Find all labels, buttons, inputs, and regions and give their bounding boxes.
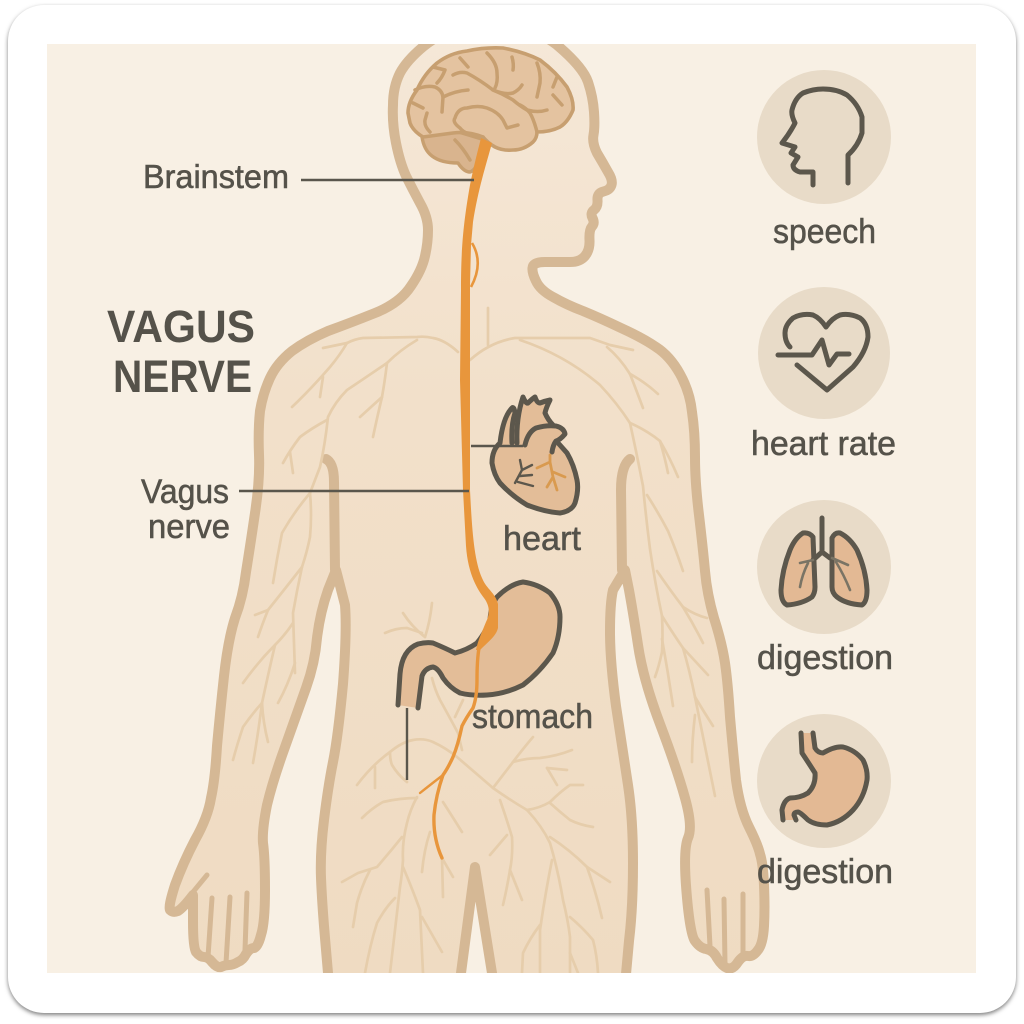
icon circle — [757, 500, 891, 634]
body figure — [170, 20, 765, 985]
coronary vessels, orange — [537, 455, 565, 490]
icon: head profile — [782, 89, 862, 185]
label: Brainstem: Brainstem — [143, 158, 289, 195]
aorta — [517, 397, 553, 443]
icon: lungs — [781, 518, 867, 605]
icon: stomach — [782, 733, 867, 825]
label: digestion — [757, 853, 893, 891]
icon: brain — [408, 48, 573, 172]
stomach organ — [398, 582, 560, 708]
cerebrum — [408, 48, 573, 150]
icon circle — [757, 714, 891, 848]
label: digestion — [757, 639, 893, 677]
main nerve trunk — [460, 138, 498, 650]
body silhouette — [170, 20, 765, 985]
leader: vagus nerve — [239, 490, 469, 492]
leader: stomach — [406, 708, 408, 780]
brain folds — [413, 53, 562, 160]
label: stomach: stomach — [472, 698, 593, 736]
label: Vagus nerve: nerve — [148, 508, 230, 546]
item: lungs digestion — [757, 500, 893, 677]
icon circle — [757, 70, 891, 204]
heart outline — [492, 408, 578, 513]
coronary nerve, dark — [515, 460, 533, 486]
arch — [525, 426, 565, 452]
leader: brainstem — [301, 179, 474, 181]
icon: heart organ — [492, 397, 578, 513]
stomach fill — [398, 582, 560, 708]
leader: heart — [471, 445, 523, 447]
label: speech — [773, 213, 876, 251]
label: Vagus nerve — [141, 473, 230, 546]
vagus nerve — [420, 138, 498, 858]
title: NERVE — [113, 351, 252, 402]
nerve branches — [233, 308, 715, 973]
icon circle — [758, 287, 890, 419]
cerebellum — [422, 130, 485, 172]
item: heart rate — [751, 287, 896, 463]
lower nerve branch — [420, 775, 443, 793]
item: stomach digestion — [757, 714, 893, 891]
label: Vagus nerve: Vagus — [141, 473, 229, 511]
neck loop — [471, 243, 478, 287]
heart fill — [492, 397, 578, 513]
armpit and finger lines — [193, 459, 743, 964]
stomach outline — [398, 582, 560, 708]
label: heart: heart — [503, 520, 582, 558]
title — [107, 301, 255, 402]
label: heart rate — [751, 425, 896, 463]
item: speech — [757, 70, 891, 251]
icon: heart with pulse — [778, 314, 868, 390]
title: VAGUS — [107, 301, 255, 352]
lower nerve — [434, 648, 479, 858]
